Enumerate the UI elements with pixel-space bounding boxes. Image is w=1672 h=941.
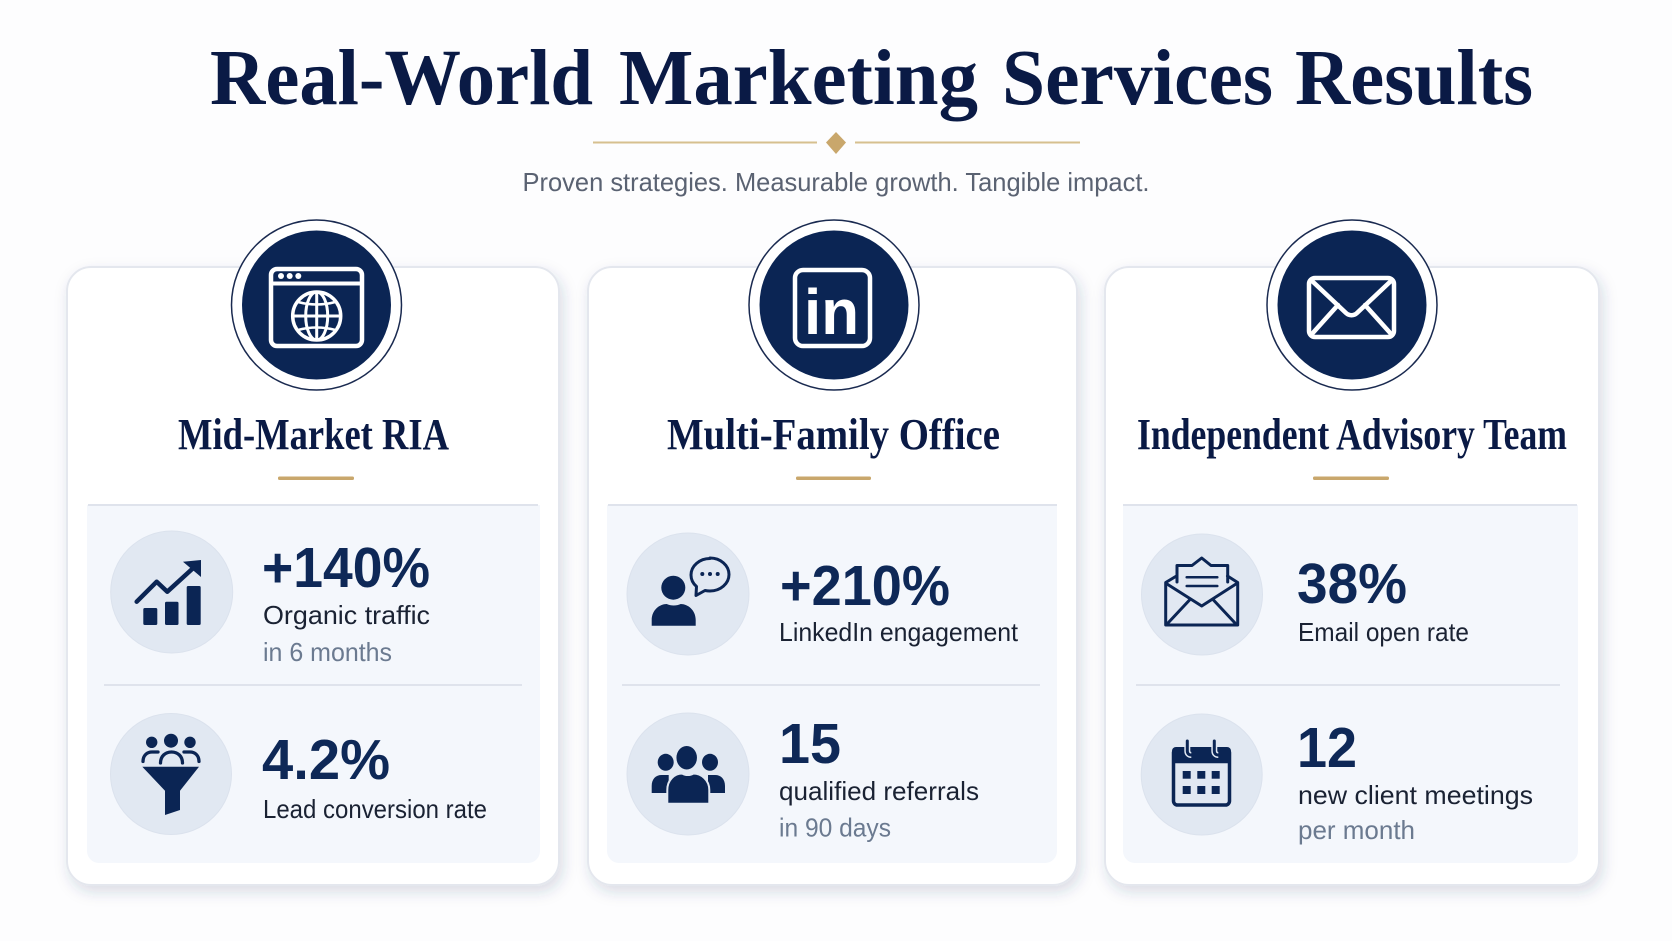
panel: Independent Advisory Team	[1105, 220, 1599, 885]
metrics background	[1123, 505, 1578, 863]
gold accent	[796, 476, 871, 480]
metrics background	[607, 505, 1057, 863]
metric: organic traffic: in 6 months	[263, 637, 392, 667]
title divider with diamond	[593, 132, 1080, 154]
icon: calendar	[1141, 714, 1262, 835]
metric: organic traffic: +140%	[262, 536, 430, 600]
title: Real-World	[210, 35, 593, 122]
icon: LinkedIn: in	[804, 276, 859, 348]
icon: LinkedIn	[749, 220, 919, 390]
metric: email open rate: Email open rate	[1298, 617, 1469, 647]
metric: qualified referrals	[779, 712, 979, 842]
heading: Multi-Family Office	[667, 410, 1000, 459]
heading: Mid-Market RIA	[178, 410, 449, 459]
subtitle: Proven strategies. Measurable growth. Tangible impact.	[522, 167, 1150, 197]
icon: funnel with people	[110, 714, 232, 834]
metric: lead conversion: 4.2%	[262, 728, 390, 792]
icon: growth chart	[111, 531, 233, 653]
icon: open envelope	[1142, 534, 1262, 655]
icon: browser with globe	[232, 220, 402, 390]
title: Results	[1295, 35, 1533, 122]
metric: qualified referrals: qualified referrals	[779, 776, 979, 806]
icon: envelope	[1267, 220, 1437, 390]
metrics background	[87, 505, 540, 863]
card background	[588, 267, 1077, 885]
metric: LinkedIn engagement: LinkedIn engagement	[779, 617, 1019, 647]
icon: person speaking	[627, 533, 749, 655]
metric: email open rate	[1297, 552, 1469, 647]
metric: lead conversion	[262, 728, 487, 824]
card background	[67, 267, 559, 885]
gold accent	[278, 476, 354, 480]
metric: new client meetings: per month	[1298, 815, 1415, 845]
metric: organic traffic	[262, 536, 430, 667]
metric: qualified referrals: 15	[779, 712, 841, 776]
metric: new client meetings	[1297, 716, 1533, 845]
heading: Independent Advisory Team	[1137, 410, 1567, 459]
panel: Mid-Market RIA	[67, 220, 559, 885]
metric: LinkedIn engagement: +210%	[780, 554, 950, 618]
title: Services	[1002, 35, 1273, 122]
title	[210, 35, 1533, 122]
metric: lead conversion: Lead conversion rate	[263, 794, 487, 824]
metric: organic traffic: Organic traffic	[263, 600, 430, 630]
metric: new client meetings: 12	[1297, 716, 1357, 780]
panel: Multi-Family Office	[588, 220, 1077, 885]
metric: LinkedIn engagement	[779, 554, 1019, 647]
icon: group of people	[627, 713, 749, 835]
title: Marketing	[619, 35, 978, 122]
metric: new client meetings: new client meetings	[1298, 780, 1533, 810]
metric: qualified referrals: in 90 days	[779, 812, 891, 842]
gold accent	[1313, 476, 1389, 480]
metric: email open rate: 38%	[1297, 552, 1407, 616]
card background	[1105, 267, 1599, 885]
